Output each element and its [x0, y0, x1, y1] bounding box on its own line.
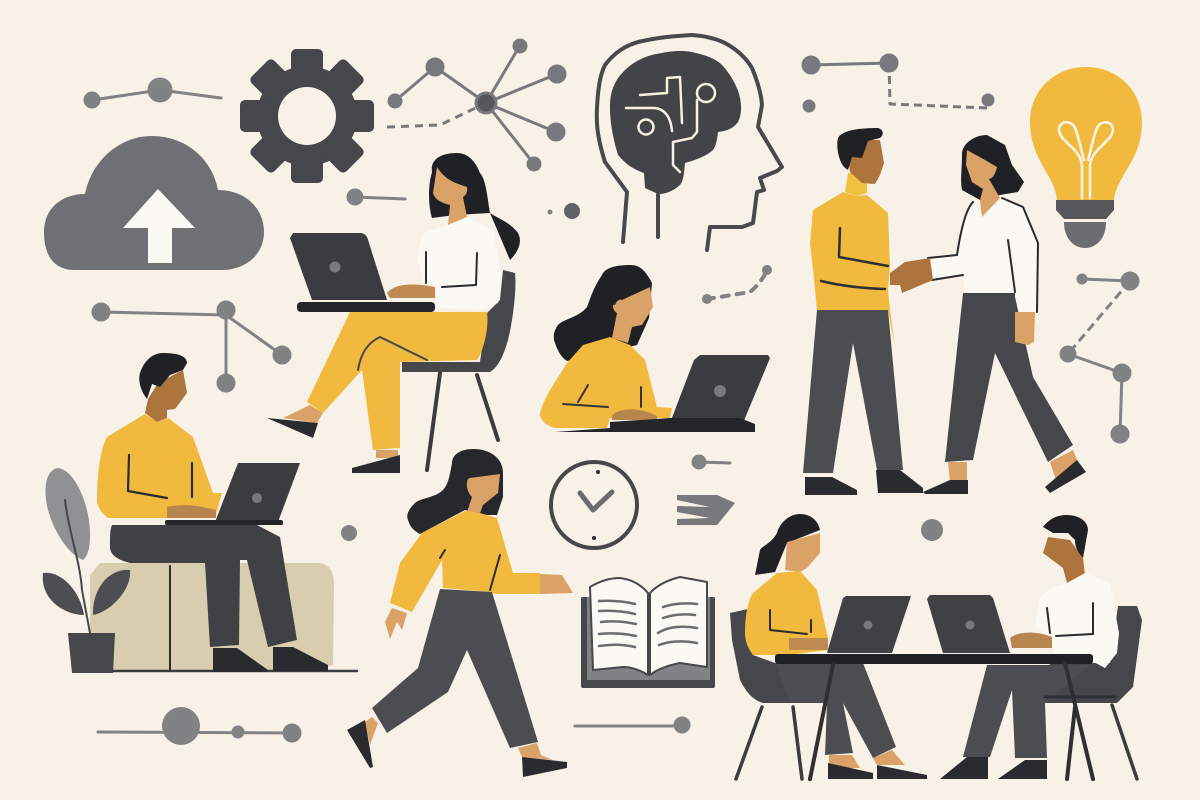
network: top centre graph	[387, 40, 565, 170]
network: top right dashed line	[803, 55, 993, 111]
icon: head with circuit brain	[597, 35, 782, 250]
network: bottom centre slider	[575, 718, 689, 732]
laptop	[290, 233, 387, 300]
hand	[387, 285, 435, 298]
figure: walking woman	[347, 449, 573, 777]
figure: woman at laptop centre	[540, 265, 770, 432]
torso	[97, 414, 222, 518]
handshake	[890, 258, 933, 293]
icon: clock	[551, 462, 637, 548]
icon: potted plant	[43, 468, 130, 673]
legs	[110, 525, 297, 647]
figure: woman with white shirt shaking hands	[890, 135, 1086, 494]
icon: open book	[581, 577, 715, 688]
icon: light bulb	[1030, 67, 1142, 248]
icon: cloud upload	[44, 136, 264, 270]
head	[145, 370, 187, 422]
figure: man seated at table	[927, 515, 1142, 779]
brain	[610, 51, 741, 194]
icon: speed streaks	[677, 495, 735, 525]
figure: man on bench with laptop	[90, 353, 357, 672]
laptop	[215, 463, 300, 522]
network: bottom left slider	[98, 707, 300, 745]
face and neck	[433, 167, 467, 225]
hair	[429, 153, 520, 260]
torso	[417, 217, 501, 310]
network: small nodes centre	[348, 190, 772, 304]
network: top left node line	[85, 79, 221, 107]
network: left branching line	[93, 302, 290, 391]
chair	[402, 270, 515, 372]
network: right side nodes	[1061, 273, 1138, 442]
icon: gear	[240, 49, 374, 183]
bench	[90, 563, 334, 671]
figure: woman seated at table	[730, 514, 927, 779]
legs	[307, 312, 488, 450]
feet	[283, 405, 323, 423]
figure: woman on chair with laptop	[267, 153, 520, 473]
figure: man with yellow shirt shaking hands	[803, 128, 923, 495]
network: small nodes lower centre	[341, 456, 943, 541]
table	[775, 654, 1115, 779]
